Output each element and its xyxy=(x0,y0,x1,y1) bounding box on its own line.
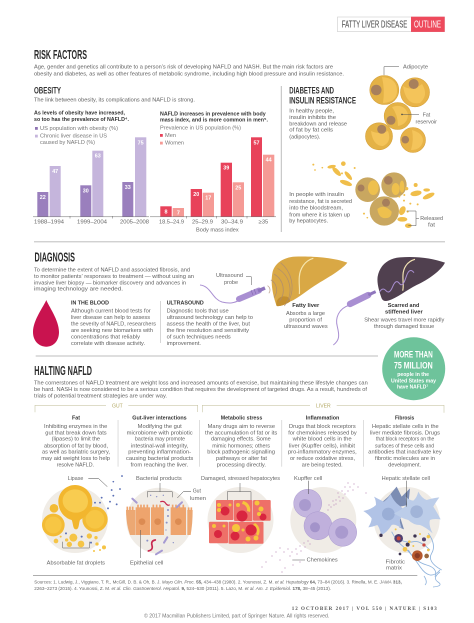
callout: more than 75 million: have NAFLD¹ xyxy=(397,385,428,391)
bar chart: obesity and chronic liver disease over time: 1999–2004 xyxy=(77,220,107,226)
column: gut-liver interactions: microbiome with probiotic xyxy=(127,430,193,436)
text: healthy people: breakdown and release xyxy=(289,121,347,127)
panel: in the blood xyxy=(71,301,156,347)
column: fat: gut that break down fats xyxy=(45,430,107,436)
column: fat: Fat xyxy=(72,415,80,421)
column: fibrosis: Fibrosis xyxy=(395,415,414,421)
bar chart: obesity and chronic liver disease over time: caused by NAFLD (%) xyxy=(40,140,95,146)
label: ultrasound probe: probe xyxy=(224,280,238,286)
column: inflammation xyxy=(288,415,357,468)
text: healthy people xyxy=(289,109,347,140)
bar chart: NAFLD prevalence by body mass index: 8 xyxy=(164,210,168,216)
label: gut lumen: lumen xyxy=(190,496,206,502)
label: adipocyte xyxy=(384,64,428,75)
column: gut-liver interactions: causing bacterial products xyxy=(126,456,193,462)
column: fibrosis: development. xyxy=(388,462,421,468)
illustration: adipocytes releasing fat xyxy=(312,161,435,228)
text: fatty liver caption: Fatty liver xyxy=(292,303,320,309)
bar chart: NAFLD prevalence by body mass index: Men xyxy=(165,133,176,139)
panel: in the blood: IN THE BLOOD xyxy=(71,301,109,307)
column: metabolic stress: Many drugs aim to reverse xyxy=(208,424,275,430)
bar chart: NAFLD prevalence by body mass index: Women xyxy=(165,141,184,147)
sources text: Sources: 1. Ludwig, J., Viggiano, T. R., McGill, D. B. & Oh, B. J. Mayo Clin. Proc. 55, 434–438 (1980). 2. Younossi, Z. M. et al. Hepatology 64, 73–84 (2016). 3. Rinella, M. E. JAMA 313, xyxy=(34,580,402,585)
bar chart: NAFLD prevalence by body mass index: 25 xyxy=(235,185,241,191)
text: insulin resistance: into the bloodstream, xyxy=(289,206,343,212)
column: inflammation: Inflammation xyxy=(306,415,340,421)
bar chart: NAFLD prevalence by body mass index: 44 xyxy=(266,158,272,164)
label: adipocyte: Adipocyte xyxy=(403,64,428,70)
icon: blood drop xyxy=(33,300,59,347)
column: metabolic stress: block pathogenic signalling xyxy=(207,450,275,456)
label: gut lumen: Gut xyxy=(193,489,201,495)
header tag: fatty liver disease outline: OUTLINE xyxy=(414,20,441,31)
column: inflammation: or reduce oxidative stress, xyxy=(290,456,355,462)
column: fat: resolve NAFLD. xyxy=(57,462,94,468)
panel: ultrasound: ultrasound technology can help to xyxy=(167,315,253,321)
panel: ultrasound xyxy=(167,301,253,347)
heading: risk factors: RISK FACTORS xyxy=(34,48,87,62)
column: gut-liver interactions: preventing inflammation- xyxy=(128,450,191,456)
label: released fat: Released xyxy=(420,216,443,222)
diagnosis intro text: invasive liver biopsy — biomarker discovery and advances in xyxy=(34,280,186,286)
heading: diagnosis: DIAGNOSIS xyxy=(34,251,75,265)
column: fat xyxy=(41,415,110,468)
panel: in the blood: the severity of NAFLD, researchers xyxy=(71,322,156,328)
label: Kupffer cell: Kupffer cell xyxy=(294,476,322,482)
column: metabolic stress: Metabolic stress xyxy=(221,415,262,421)
label: bacterial products: Bacterial products xyxy=(136,476,182,482)
bar chart: NAFLD prevalence by body mass index: 18.5–24.9 xyxy=(159,220,184,226)
bar chart: obesity and chronic liver disease over time: 30 xyxy=(83,188,89,194)
label: damaged, stressed hepatocytes: Damaged, stressed hepatocytes xyxy=(201,476,280,482)
bar chart: NAFLD prevalence by body mass index: 17 xyxy=(205,196,211,202)
panel: obesity xyxy=(33,86,276,234)
label: fibrotic matrix: Fibrotic xyxy=(386,559,405,565)
text: insulin resistance: In people with insulin xyxy=(289,192,344,198)
column: metabolic stress: damaging effects. Some xyxy=(211,437,271,443)
bar chart: obesity and chronic liver disease over time: 2005–2008 xyxy=(120,220,149,226)
label: released fat xyxy=(407,211,443,229)
column: inflammation: liver (Kupffer cells), inhibit xyxy=(289,443,355,449)
label: ultrasound probe: Ultrasound xyxy=(216,273,243,279)
label: released fat: fat xyxy=(428,223,436,229)
panel: ultrasound: Diagnostic tools that use xyxy=(167,309,229,315)
panel: diabetes and insulin resistance xyxy=(289,64,443,229)
bar chart: NAFLD prevalence by body mass index: Body mass index xyxy=(196,228,239,234)
panel: ultrasound: the fine resolution and sensitivity xyxy=(167,328,249,334)
text: fatty liver caption: proportion of xyxy=(289,318,322,324)
illustration: hepatic stellate cells and fibrotic matrix xyxy=(363,476,442,587)
label: gut lumen xyxy=(177,489,206,502)
bar chart: obesity and chronic liver disease over time: 1988–1994 xyxy=(34,220,64,226)
diagnosis intro text xyxy=(34,267,194,293)
heading: diabetes and insulin resistance: DIABETES AND xyxy=(289,85,334,95)
column: fibrosis: liver mediate fibrosis. Drugs xyxy=(370,430,440,436)
icon: ultrasound probe on fatty liver xyxy=(200,285,265,303)
bar chart: obesity and chronic liver disease over time: US population with obesity (%) xyxy=(40,126,118,132)
column: metabolic stress: the accumulation of fat or its xyxy=(205,430,277,436)
bracket: liver: LIVER xyxy=(316,403,331,409)
bracket: gut: GUT xyxy=(112,403,123,409)
header tag: fatty liver disease outline: FATTY LIVER DISEASE xyxy=(342,20,407,31)
sources text: 2263–2273 (2015). 4. Younossi, Z. M. et al. Clin. Gastroenterol. Hepatol. 9, 524–530 (2011). 5. Lazo, M. et al. Am. J. Epidemiol. 178, 38–45 (2013). xyxy=(34,586,331,591)
column: fibrosis: that block receptors on the xyxy=(376,437,434,443)
label: fat reservoir: Fat xyxy=(423,113,431,119)
panel: ultrasound: ULTRASOUND xyxy=(167,301,204,307)
illustration: lipase and fat droplets xyxy=(42,475,123,566)
bar chart: NAFLD prevalence by body mass index: 20 xyxy=(193,192,199,198)
page footer: issue line: 12 OCTOBER 2017 | VOL 550 | NATURE | S103 xyxy=(292,607,437,612)
halting NAFLD intro text xyxy=(34,381,368,400)
column: metabolic stress xyxy=(205,415,277,468)
column: inflammation: pro-inflammatory enzymes, xyxy=(288,450,357,456)
text: fatty liver caption: ultrasound waves xyxy=(284,324,328,330)
text: insulin resistance: resistance, fat is secreted xyxy=(289,199,352,205)
label: fat reservoir xyxy=(401,113,437,125)
panel: in the blood: liver disease can help to assess xyxy=(71,315,150,321)
bar chart: obesity and chronic liver disease over time: 22 xyxy=(40,195,46,201)
heading: obesity: OBESITY xyxy=(34,86,61,96)
column: metabolic stress: processing directly. xyxy=(217,462,266,468)
label: epithelial cell: Epithelial cell xyxy=(130,560,163,566)
column: gut-liver interactions: from reaching the liver. xyxy=(131,462,189,468)
label: fibrotic matrix: matrix xyxy=(386,566,402,572)
halting NAFLD intro text: be hard. NASH is now considered to be a serious condition that requires the development of targeted drugs. As a result, hundreds of xyxy=(34,387,367,393)
diagnosis intro text: to monitor patients’ responses to treatment — without using an xyxy=(34,274,194,280)
bar chart: NAFLD prevalence by body mass index: 39 xyxy=(223,166,229,172)
panel: ultrasound: improvement. xyxy=(167,341,201,347)
illustration: gut epithelium and bacteria xyxy=(126,476,206,566)
bar chart: NAFLD prevalence by body mass index: mass index, and is more common in men⁵. xyxy=(160,118,268,124)
bar chart: obesity and chronic liver disease over time: 33 xyxy=(125,185,131,191)
column: fibrosis: antibodies that inactivate key xyxy=(368,450,442,456)
bar chart: obesity and chronic liver disease over time: Chronic liver disease in US xyxy=(40,134,107,140)
illustration: damaged hepatocytes xyxy=(201,476,280,553)
column: fibrosis: Hepatic stellate cells in the xyxy=(372,424,439,430)
text: fatty liver caption: Absorbs a large xyxy=(286,311,325,317)
text: fatty liver caption xyxy=(284,303,328,330)
label: ultrasound probe xyxy=(216,273,251,286)
diagnosis intro text: imaging technology are needed. xyxy=(34,287,123,293)
bar chart: obesity and chronic liver disease over time: so too has the prevalence of NAFLD⁴. xyxy=(34,117,129,123)
column: gut-liver interactions: bacteria may promote xyxy=(135,437,185,443)
column: inflammation: for chemokines released by xyxy=(288,430,357,436)
bracket: gut xyxy=(35,403,198,412)
bar chart: NAFLD prevalence by body mass index: ≥35 xyxy=(259,220,268,226)
heading: diabetes and insulin resistance xyxy=(289,85,356,105)
risk factors intro text: obesity and diabetes, as well as other features of metabolic syndrome, including high blood pressure and insulin resistance. xyxy=(34,71,344,77)
diagnosis intro text: To determine the extent of NAFLD and associated fibrosis, and xyxy=(34,267,190,273)
text: healthy people: In healthy people, xyxy=(289,109,334,115)
column: gut-liver interactions: Modifying the gut xyxy=(138,424,182,430)
panel: ultrasound: assess the health of the liver, but xyxy=(167,322,250,328)
column: fat: as well as bariatric surgery, xyxy=(42,450,110,456)
text: healthy people: insulin inhibits the xyxy=(289,115,336,121)
column: gut-liver interactions xyxy=(126,415,193,468)
label: fat reservoir: reservoir xyxy=(416,119,437,125)
text: healthy people: of fat by fat cells xyxy=(289,128,333,134)
column: inflammation: Drugs that block receptors xyxy=(289,424,356,430)
icon: fibrotic matrix strands xyxy=(424,572,440,587)
bar chart: obesity and chronic liver disease over time: 75 xyxy=(138,140,144,146)
callout: more than 75 million: 75 MILLION xyxy=(394,360,433,371)
column: metabolic stress: pathways or alter fat xyxy=(216,456,267,462)
bar chart: NAFLD prevalence by body mass index: 30–34.9 xyxy=(221,220,243,226)
halting NAFLD intro text: The cornerstones of NAFLD treatment are weight loss and increased amounts of exercise, but maintaining these lifestyle changes can xyxy=(34,381,368,387)
column: inflammation: are being tested. xyxy=(302,462,343,468)
text: insulin resistance xyxy=(289,192,352,225)
text: scarred liver caption: Scarred and xyxy=(388,303,420,309)
bar chart: NAFLD prevalence by body mass index: 7 xyxy=(177,210,180,216)
bar chart: obesity and chronic liver disease over time xyxy=(33,110,149,226)
illustration: scarred and stiffened liver with probe xyxy=(333,257,445,345)
illustration: Kupffer cells and chemokines xyxy=(261,476,367,573)
text: scarred liver caption: through damaged tissue xyxy=(374,324,434,330)
label: chemokines: Chemokines xyxy=(307,558,338,564)
illustration: healthy adipocytes xyxy=(366,76,430,152)
bar chart: NAFLD prevalence by body mass index: Prevalence in US population (%) xyxy=(160,126,241,132)
label: fibrotic matrix xyxy=(386,559,405,572)
risk factors intro text: Age, gender and genetics all contribute to a person’s risk of developing NAFLD and NASH. But the main risk factors are xyxy=(34,64,333,70)
column: inflammation: white blood cells in the xyxy=(292,437,352,443)
bar chart: NAFLD prevalence by body mass index: 57 xyxy=(254,140,260,146)
heading: diabetes and insulin resistance: INSULIN RESISTANCE xyxy=(289,95,356,105)
column: fibrosis xyxy=(368,415,442,468)
text: scarred liver caption: Shear waves travel more rapidly xyxy=(364,317,444,323)
bar chart: obesity and chronic liver disease over time: As levels of obesity have increased, xyxy=(34,110,125,116)
text: healthy people: (adipocytes). xyxy=(289,134,321,140)
column: fat: Inhibiting enzymes in the xyxy=(44,424,107,430)
panel: in the blood: correlate with disease activity. xyxy=(71,341,145,347)
column: fat: absorption of fat by blood, xyxy=(44,443,108,449)
halting NAFLD intro text: trials of potential treatment strategies are under way. xyxy=(34,394,167,400)
text: insulin resistance: from where it is taken up xyxy=(289,212,350,218)
bracket: liver xyxy=(202,403,444,413)
label: absorbable fat droplets: Absorbable fat droplets xyxy=(47,560,105,566)
obesity intro: The link between obesity, its complications and NAFLD is strong. xyxy=(34,98,195,104)
bar chart: NAFLD prevalence by body mass index: 25–29.9 xyxy=(192,220,213,226)
column: gut-liver interactions: intestinal-wall integrity, xyxy=(131,443,189,449)
risk factors intro text xyxy=(34,64,344,77)
bar chart: NAFLD prevalence by body mass index: NAFLD increases in prevalence with body xyxy=(160,111,267,117)
illustration: fatty liver xyxy=(267,257,347,306)
text: scarred liver caption xyxy=(364,303,444,330)
text: insulin resistance: by hepatocytes. xyxy=(289,219,328,225)
column: fibrosis: fibrotic molecules are in xyxy=(375,456,435,462)
column: fat: (lipases) to limit the xyxy=(52,437,100,443)
text: scarred liver caption: stiffened liver xyxy=(385,309,424,315)
bar chart: obesity and chronic liver disease over time: 63 xyxy=(95,154,101,160)
panel: in the blood: concentrations that reliably xyxy=(71,334,140,340)
column: gut-liver interactions: Gut-liver interactions xyxy=(132,415,187,421)
bar chart: NAFLD prevalence by body mass index xyxy=(150,111,276,234)
copyright line: © 2017 Macmillan Publishers Limited, part of Springer Nature. All rights reserved. xyxy=(144,612,329,619)
column: fibrosis: surfaces of these cells and xyxy=(375,443,434,449)
callout: more than 75 million: MORE THAN xyxy=(394,350,433,361)
callout: more than 75 million xyxy=(382,337,445,400)
panel: ultrasound: of such techniques needs xyxy=(167,334,231,340)
header tag: fatty liver disease outline xyxy=(338,17,445,32)
panel: in the blood: Although current blood tests for xyxy=(71,309,151,315)
label: lipase: Lipase xyxy=(68,476,83,482)
callout: more than 75 million: United States may xyxy=(391,378,436,384)
column: metabolic stress: mimic hormones; others xyxy=(212,443,270,449)
panel: in the blood: are seeking new biomarkers with xyxy=(71,328,153,334)
heading: halting NAFLD: HALTING NAFLD xyxy=(34,364,92,378)
column: fat: may aid weight loss to help xyxy=(41,456,110,462)
sources text xyxy=(34,580,402,591)
bar chart: obesity and chronic liver disease over time: 47 xyxy=(52,169,58,175)
label: hepatic stellate cell: Hepatic stellate cell xyxy=(382,476,430,482)
callout: more than 75 million: people in the xyxy=(397,372,429,378)
